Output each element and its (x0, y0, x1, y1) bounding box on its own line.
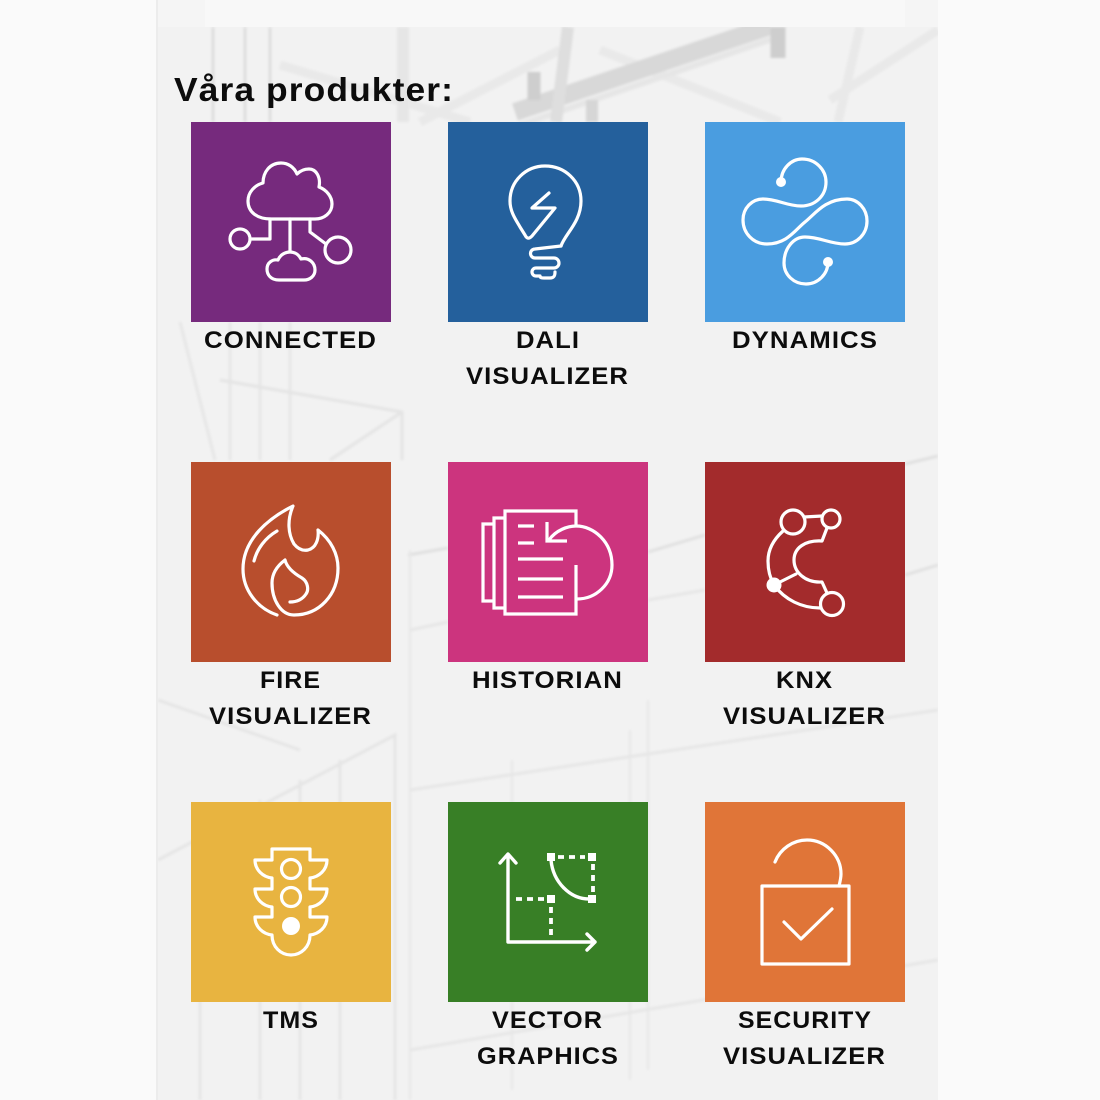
panel: connected (191, 122, 391, 354)
panel: historian (448, 462, 648, 694)
icon: cloud network (230, 163, 351, 280)
label: connected: CONNECTED (204, 327, 377, 354)
icon: vector axes (500, 853, 596, 950)
tile: connected (191, 122, 391, 322)
panel: security visualizer (705, 802, 905, 1070)
panel: dynamics (705, 122, 905, 354)
tile: dali (448, 122, 648, 322)
label: dynamics: DYNAMICS (732, 327, 878, 354)
panel: dali visualizer (448, 122, 648, 390)
icon: infinity curve (743, 159, 867, 284)
label: security visualizer (723, 1007, 886, 1070)
icon: light bulb (510, 166, 581, 278)
title: Våra produkter: (174, 71, 454, 108)
panel: tms (191, 802, 391, 1034)
tile: tms (191, 802, 391, 1002)
label: knx visualizer: KNX (776, 667, 833, 694)
label: security visualizer: SECURITY (738, 1007, 872, 1034)
icon: flame (243, 506, 338, 615)
background photo (158, 0, 938, 1100)
label: vector graphics (477, 1007, 619, 1070)
icon: traffic light (255, 849, 327, 955)
label: fire visualizer: VISUALIZER (209, 703, 372, 730)
panel: fire visualizer (191, 462, 391, 730)
tile: historian (448, 462, 648, 662)
label: tms: TMS (263, 1007, 319, 1034)
label: fire visualizer (209, 667, 372, 730)
tile: security (705, 802, 905, 1002)
label: security visualizer: VISUALIZER (723, 1043, 886, 1070)
tile: knx (705, 462, 905, 662)
label: vector graphics: GRAPHICS (477, 1043, 619, 1070)
label: dali visualizer (466, 327, 629, 390)
panel: knx visualizer (705, 462, 905, 730)
label: vector graphics: VECTOR (492, 1007, 603, 1034)
panel: vector graphics (448, 802, 648, 1070)
tile: dynamics (705, 122, 905, 322)
icon: knx nodes (766, 510, 844, 616)
label: historian: HISTORIAN (472, 667, 623, 694)
label: dali visualizer: DALI (516, 327, 580, 354)
label: fire visualizer: FIRE (260, 667, 321, 694)
label: knx visualizer: VISUALIZER (723, 703, 886, 730)
icon: open padlock (762, 840, 849, 964)
icon: documents history (483, 511, 612, 614)
label: knx visualizer (723, 667, 886, 730)
tile: vector (448, 802, 648, 1002)
label: dali visualizer: VISUALIZER (466, 363, 629, 390)
tile: fire (191, 462, 391, 662)
